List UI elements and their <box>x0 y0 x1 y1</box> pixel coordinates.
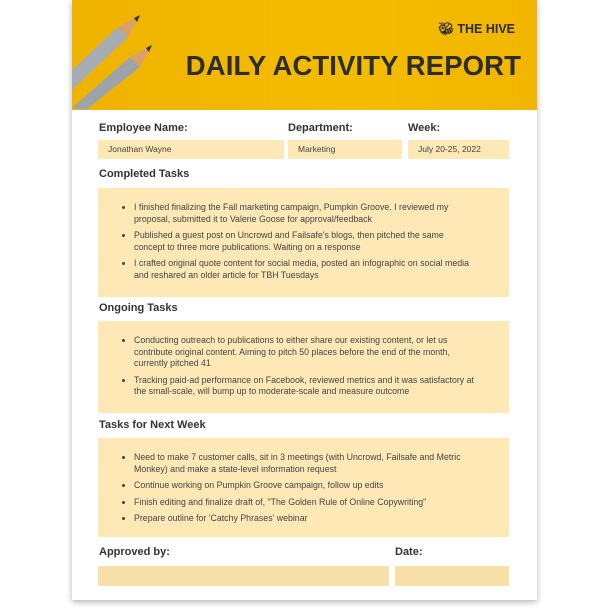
heading: ongoing tasks: Ongoing Tasks <box>99 302 178 314</box>
panel: next week <box>98 438 509 537</box>
panel: ongoing tasks: Conducting outreach to publications to either share our existing content, or let us contribute original content. Aiming to pitch 50 places before the end of the month, currently pitched 41 <box>134 335 450 368</box>
panel: ongoing tasks <box>98 321 509 413</box>
title: DAILY ACTIVITY REPORT <box>186 50 521 81</box>
field: date <box>395 566 509 586</box>
page card <box>72 0 537 600</box>
field: name: Jonathan Wayne <box>108 144 171 154</box>
panel: next week: Prepare outline for 'Catchy Phrases' webinar <box>134 513 308 523</box>
field: department <box>288 140 402 159</box>
panel: ongoing tasks: Tracking paid-ad performance on Facebook, reviewed metrics and it was satisfactory at the small-scale, will bump up to moderate-scale and measure outcome <box>134 374 474 396</box>
panel: completed tasks: I crafted original quote content for social media, posted an infographic on social media and reshared an older article for TBH Tuesdays <box>134 258 469 280</box>
field: week: July 20-25, 2022 <box>418 144 481 154</box>
panel: next week: Finish editing and finalize draft of, "The Golden Rule of Online Copywriting" <box>134 496 426 506</box>
panel: completed tasks: Published a guest post on Uncrowd and Failsafe's blogs, then pitched the same concept to three more publications. Waiting on a response <box>134 230 444 252</box>
field: approved <box>98 566 389 586</box>
heading: tasks for next week: Tasks for Next Week <box>99 419 206 431</box>
label: department: Department: <box>288 122 353 134</box>
field: week <box>408 140 509 159</box>
label: approved by: Approved by: <box>99 546 170 558</box>
label: date: Date: <box>395 546 423 558</box>
pencils illustration <box>72 15 152 110</box>
field: department: Marketing <box>298 144 335 154</box>
heading: completed tasks: Completed Tasks <box>99 168 189 180</box>
header banner <box>72 0 537 110</box>
panel: next week: Continue working on Pumpkin Groove campaign, follow up edits <box>134 480 383 490</box>
brand: the hive: 🐝︎ THE HIVE <box>438 22 515 36</box>
panel: next week: Need to make 7 customer calls, sit in 3 meetings (with Uncrowd, Failsafe and Metric Monkey) and make a state-level information request <box>134 452 461 474</box>
field: name <box>98 140 284 159</box>
label: employee name: Employee Name: <box>99 122 188 134</box>
panel: completed tasks <box>98 188 509 297</box>
panel: completed tasks: I finished finalizing the Fall marketing campaign, Pumpkin Groove. I reviewed my proposal, submitted it to Valerie Goose for approval/feedback <box>134 202 448 224</box>
label: week: Week: <box>408 122 440 134</box>
